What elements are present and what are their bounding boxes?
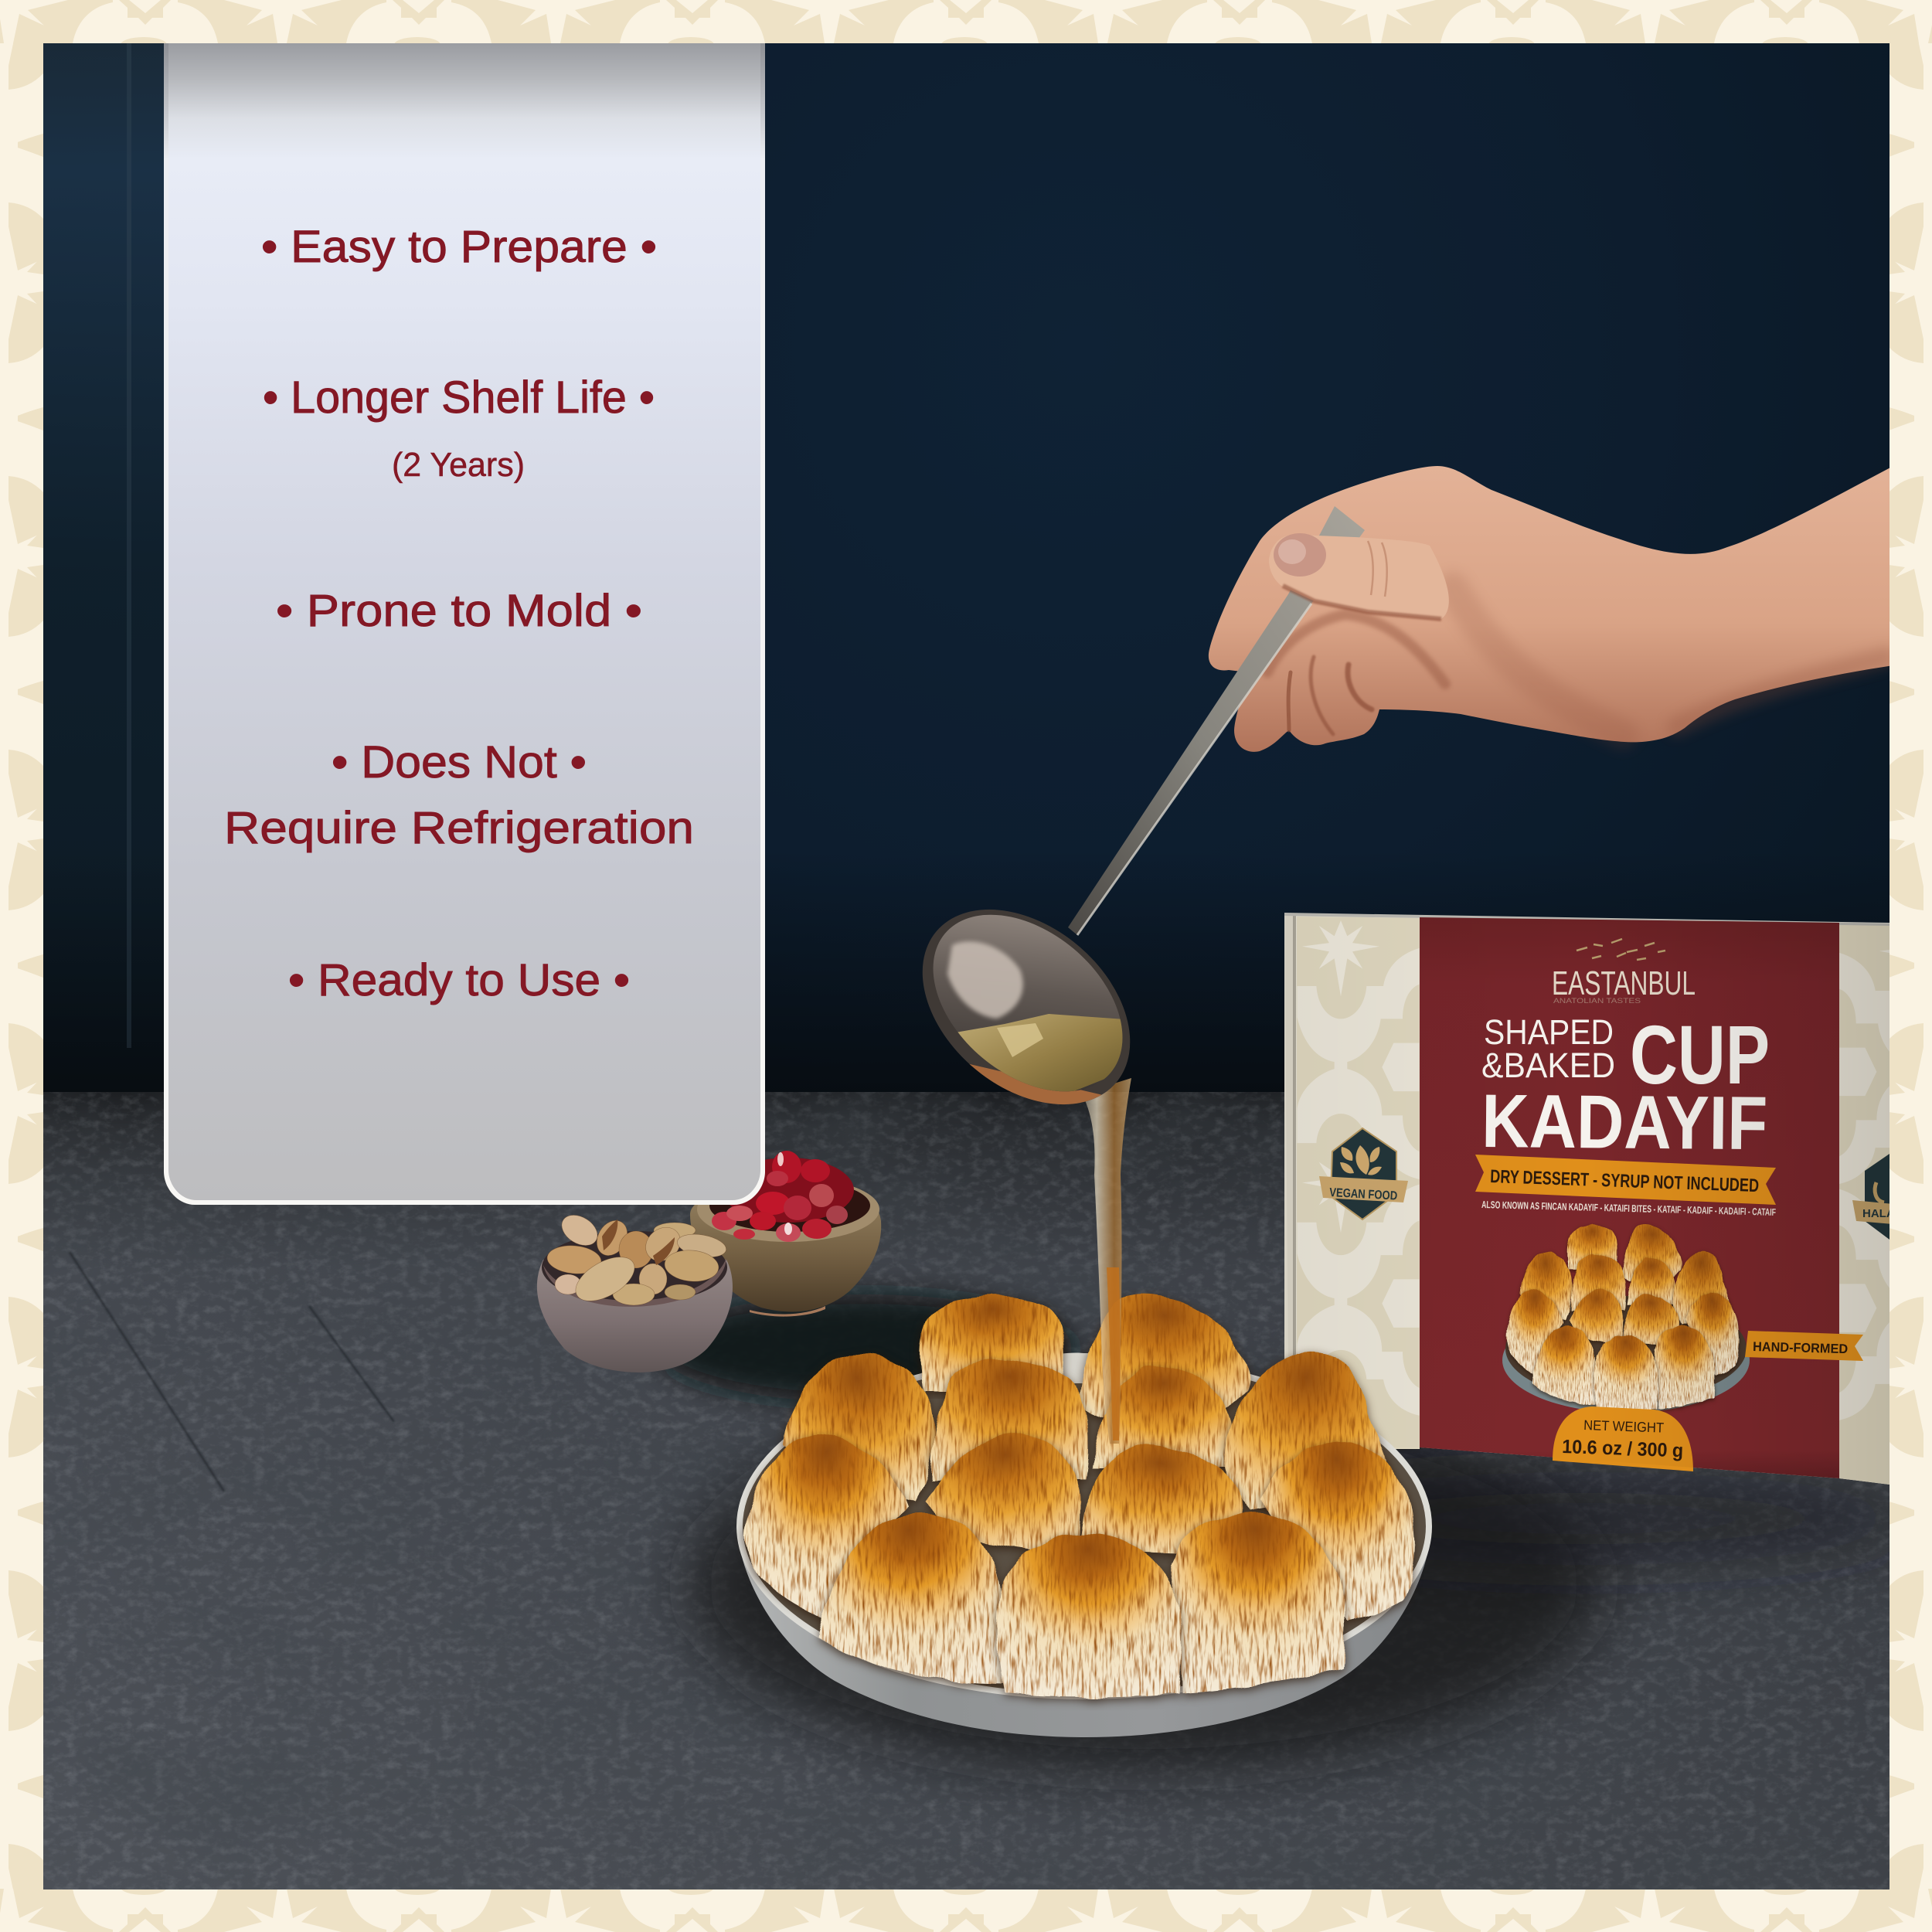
pistachio bowl <box>537 1209 733 1372</box>
box title <box>1481 1008 1770 1165</box>
box title: CUP <box>1630 1008 1770 1101</box>
vegan food badge <box>1319 1128 1408 1219</box>
benefit: ready to use: • Ready to Use • <box>288 955 630 1005</box>
benefit: does not require refrigeration <box>224 737 694 853</box>
benefit: longer shelf life <box>263 372 655 484</box>
box ribbon: hand-formed: HAND-FORMED <box>1753 1339 1848 1356</box>
pomegranate bowl <box>690 1151 881 1317</box>
halal badge <box>1852 1154 1902 1240</box>
vegan food badge: VEGAN FOOD <box>1329 1186 1398 1203</box>
box logo: EASTANBUL <box>1552 964 1696 1002</box>
box title: KADAYIF <box>1481 1078 1768 1165</box>
dark navy wall <box>43 43 1889 1102</box>
ladle handle <box>1068 506 1365 935</box>
arm and hand <box>1209 466 1893 752</box>
kadayif rolls <box>745 1294 1415 1697</box>
thumb <box>1269 533 1449 619</box>
syrup stream <box>1082 1078 1131 1444</box>
box title: SHAPED <box>1484 1012 1614 1052</box>
box ribbon: dry dessert: DRY DESSERT - SYRUP NOT INCLUDED <box>1490 1166 1760 1196</box>
box side shading <box>1284 913 1889 1485</box>
pomegranate seeds <box>712 1151 854 1242</box>
ladle copper underside <box>947 1059 1113 1121</box>
pan back rim glimpse <box>1060 1352 1090 1383</box>
benefit: easy to prepare: • Easy to Prepare • <box>261 222 657 272</box>
benefit: does not require refrigeration: • Does Not • <box>332 737 587 787</box>
ladle reflection <box>947 941 1023 1019</box>
syrup in ladle <box>947 1014 1136 1101</box>
box ribbon: dry dessert <box>1475 1155 1776 1205</box>
table shadows <box>657 1294 1917 1770</box>
box title: &BAKED <box>1481 1046 1615 1085</box>
benefit: does not require refrigeration: Require Refrigeration <box>224 803 694 853</box>
box net weight tab <box>1553 1406 1693 1471</box>
left translucent panel with benefits <box>164 43 765 1205</box>
pan with kadayif <box>736 1294 1432 1737</box>
pan body <box>736 1526 1432 1737</box>
box mini product photo <box>1502 1225 1750 1413</box>
box top edge <box>1284 914 1889 924</box>
pan interior and rim <box>740 1356 1429 1696</box>
ladle bowl <box>885 870 1168 1144</box>
benefit: longer shelf life: (2 Years) <box>392 446 525 484</box>
box pattern left face <box>1294 912 1422 1453</box>
box net weight tab: NET WEIGHT <box>1583 1417 1664 1436</box>
box spine <box>1284 916 1296 1359</box>
box logo <box>1552 939 1696 1005</box>
pistachios <box>546 1209 728 1310</box>
box net weight tab: 10.6 oz / 300 g <box>1562 1436 1684 1461</box>
halal badge: HALAL <box>1862 1207 1902 1220</box>
product box <box>1284 912 1932 1492</box>
slate table <box>43 1092 1889 1889</box>
hand holding ladle <box>1068 466 1893 935</box>
box also-known-as line: ALSO KNOWN AS FINCAN KADAYIF - KATAIFI BITES - KATAIF - KADAIF - KADAIFI - CATAIF <box>1481 1199 1776 1218</box>
benefit: longer shelf life: • Longer Shelf Life • <box>263 372 655 423</box>
box logo: ANATOLIAN TASTES <box>1553 997 1641 1005</box>
benefit: prone to mold: • Prone to Mold • <box>276 586 642 636</box>
box pattern right face <box>1839 925 1889 1485</box>
box red front panel <box>1420 917 1839 1478</box>
hand shading <box>1267 587 1886 734</box>
box ribbon: hand-formed <box>1745 1331 1863 1361</box>
